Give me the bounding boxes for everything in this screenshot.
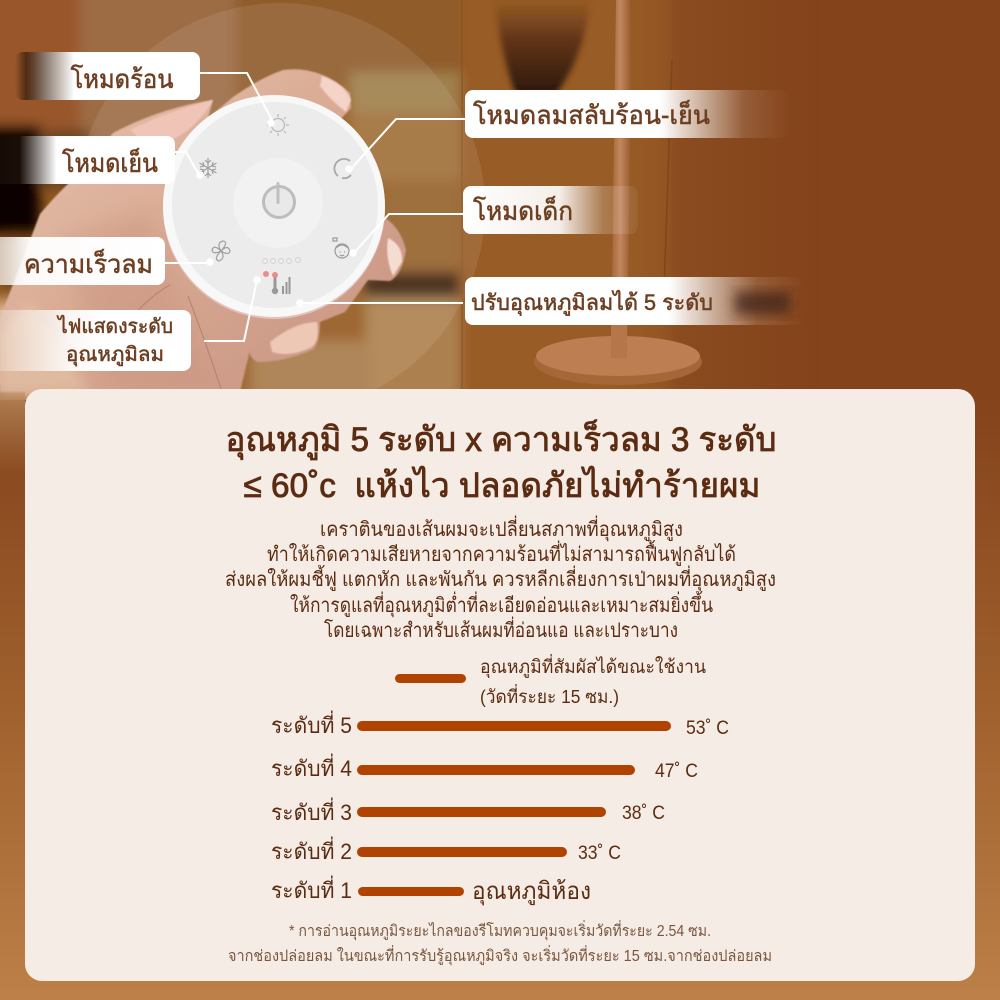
index finger nail — [130, 100, 213, 143]
level 2 bar — [271, 836, 621, 864]
label: hot mode — [15, 52, 200, 100]
red indicator lights — [263, 271, 278, 278]
bar chart: temperature per level — [271, 710, 729, 906]
level 5 bar: ระดับที่ 5 — [271, 710, 352, 738]
left margin glow below photo — [0, 385, 25, 475]
level 4 bar: ระดับที่ 4 — [271, 753, 352, 781]
lamp pole and base — [534, 0, 702, 385]
heading: อุณหภูมิ 5 ระดับ x ความเร็วลม 3 ระดับ — [226, 419, 776, 460]
body text: โดยเฉพาะสำหรับเส้นผมที่อ่อนแอ และเปราะบาง — [324, 616, 678, 642]
level indicators — [262, 258, 300, 264]
label: wind speed: ความเร็วลม — [24, 248, 153, 279]
body text: ทำให้เกิดความเสียหายจากความร้อนที่ไม่สามารถฟื้นฟูกลับได้ — [267, 540, 736, 567]
heading — [226, 419, 776, 505]
body text — [225, 515, 776, 642]
footnote — [228, 920, 772, 966]
body text: ส่งผลให้ผมชี้ฟู แตกหัก และพันกัน ควรหลีกเลี่ยงการเป่าผมที่อุณหภูมิสูง — [225, 565, 776, 592]
palm creases — [120, 285, 222, 392]
top finger nail — [320, 76, 351, 112]
level 2 bar: 33˚ C — [578, 843, 621, 864]
hair of person — [496, 4, 589, 90]
level 5 bar — [271, 710, 729, 739]
level 3 bar: ระดับที่ 3 — [271, 797, 352, 825]
label: alternating hot-cold air mode — [465, 90, 790, 138]
body text: ให้การดูแลที่อุณหภูมิต่ำที่ละเอียดอ่อนและเหมาะสมยิ่งขึ้น — [290, 591, 713, 618]
icon: fan — [212, 241, 230, 261]
footnote: * การอ่านอุณหภูมิระยะไกลของรีโมทควบคุมจะเริ่มวัดที่ระยะ 2.54 ซม. — [289, 920, 711, 941]
icon: thermometer and bars — [272, 277, 290, 294]
icon: snowflake — [200, 158, 216, 178]
label: temperature indicator light: ไฟแสดงระดับ — [56, 315, 173, 338]
level 2 bar: ระดับที่ 2 — [271, 836, 352, 864]
legend: อุณหภูมิที่สัมผัสได้ขณะใช้งาน — [480, 654, 706, 679]
icon: alternate cycle — [334, 159, 351, 178]
connector lines and dots — [165, 73, 465, 341]
hand holding remote — [0, 69, 406, 392]
legend — [395, 654, 706, 707]
background photo: room with sofa and lamp — [0, 0, 689, 400]
label: cold mode: โหมดเย็น — [62, 147, 158, 178]
label: temperature indicator light — [0, 310, 191, 371]
level 3 bar: 38˚ C — [622, 803, 665, 824]
level 1 bar — [271, 875, 591, 906]
thumb nail — [270, 322, 318, 354]
heading: ≤ 60˚c แห้งไว ปลอดภัยไม่ทำร้ายผม — [244, 466, 760, 505]
level 4 bar — [271, 753, 698, 782]
body text: เคราตินของเส้นผมจะเปลี่ยนสภาพที่อุณหภูมิสูง — [320, 515, 683, 542]
label: alternating hot-cold air mode: โหมดลมสลับร้อน-เย็น — [473, 99, 710, 130]
icon: child — [333, 238, 349, 258]
label: adjustable air temperature 5 levels — [465, 277, 805, 325]
label: temperature indicator light: อุณหภูมิลม — [66, 344, 164, 367]
legend: (วัดที่ระยะ 15 ซม.) — [480, 684, 619, 707]
level 3 bar — [271, 797, 665, 825]
label: hot mode: โหมดร้อน — [70, 64, 174, 94]
level 1 bar: ระดับที่ 1 — [271, 875, 352, 903]
label: adjustable air temperature 5 levels: ปรับอุณหภูมิลมได้ 5 ระดับ — [471, 290, 713, 316]
label: kids mode: โหมดเด็ก — [473, 195, 573, 226]
power button — [233, 158, 323, 248]
label: kids mode — [463, 186, 638, 234]
label: cold mode — [0, 136, 175, 184]
panel: temperature info — [25, 389, 975, 981]
remote control — [163, 95, 385, 319]
level 4 bar: 47˚ C — [655, 761, 698, 782]
halo circle — [75, 3, 485, 413]
icon: sun — [267, 114, 289, 136]
ring finger nail — [387, 238, 402, 276]
level 5 bar: 53˚ C — [686, 718, 729, 739]
level 1 bar: อุณหภูมิห้อง — [472, 878, 591, 906]
footnote: จากช่องปล่อยลม ในขณะที่การรับรู้อุณหภูมิจริง จะเริ่มวัดที่ระยะ 15 ซม.จากช่องปล่อยลม — [228, 945, 772, 966]
label: wind speed — [0, 237, 165, 285]
